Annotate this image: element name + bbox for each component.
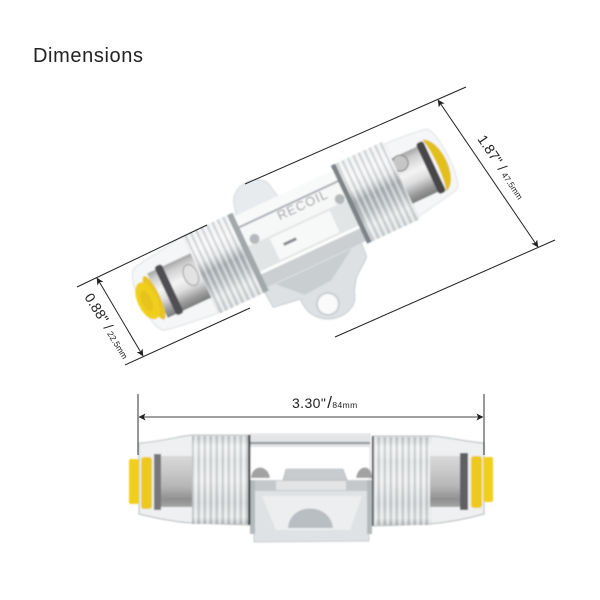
left threads: [183, 212, 270, 314]
left silver terminal: [161, 456, 193, 507]
left dark ring: [154, 454, 161, 510]
left yellow cap: [129, 459, 139, 504]
right dark ring: [460, 453, 468, 510]
bracket side pillars: [250, 480, 255, 534]
right dark ring: [415, 141, 446, 195]
left screw: [251, 468, 270, 478]
right threads: [375, 437, 431, 525]
left threads: [192, 436, 249, 524]
fuse window body: [234, 169, 369, 287]
left clear tube end: [122, 236, 218, 341]
right clear tube end: [385, 122, 466, 216]
left yellow cap: [128, 274, 170, 327]
right screw: [390, 153, 411, 174]
bracket screw hole: [313, 289, 343, 319]
title: Dimensions: [33, 45, 143, 67]
right collar: [331, 164, 372, 244]
right threads: [334, 141, 420, 242]
rotated fuse holder photo: [111, 100, 490, 392]
brand mark on window: RECOIL: [275, 187, 330, 223]
bottom mounting bracket: [259, 235, 387, 341]
right silver terminal: [390, 144, 443, 205]
left dark ring: [154, 264, 184, 316]
center collars: [248, 435, 250, 525]
left silver terminal: [147, 252, 215, 318]
fuse window: [250, 434, 370, 484]
left collar: [227, 213, 269, 293]
right yellow ring: [471, 456, 482, 508]
mount bracket: [254, 490, 369, 542]
left clear tube end: [139, 435, 250, 525]
left screw: [180, 262, 202, 288]
right silver terminal: [430, 456, 461, 507]
right screw: [356, 468, 372, 478]
top mounting ear: [224, 172, 281, 220]
overall length label: 3.30"/84mm: [292, 393, 358, 412]
width label: 0.88"/22.5mm: [81, 290, 134, 361]
right clear tube end: [374, 436, 484, 526]
dimension lines for rotated view: [77, 87, 555, 365]
horizontal fuse holder photo: [129, 434, 493, 542]
right yellow cap: [422, 134, 458, 191]
left yellow ring: [141, 457, 152, 509]
horizontal dimension: [138, 394, 484, 455]
length label: 1.87"/47.5mm: [475, 132, 529, 202]
fuse blade: [283, 469, 347, 480]
right yellow cap: [483, 457, 493, 502]
